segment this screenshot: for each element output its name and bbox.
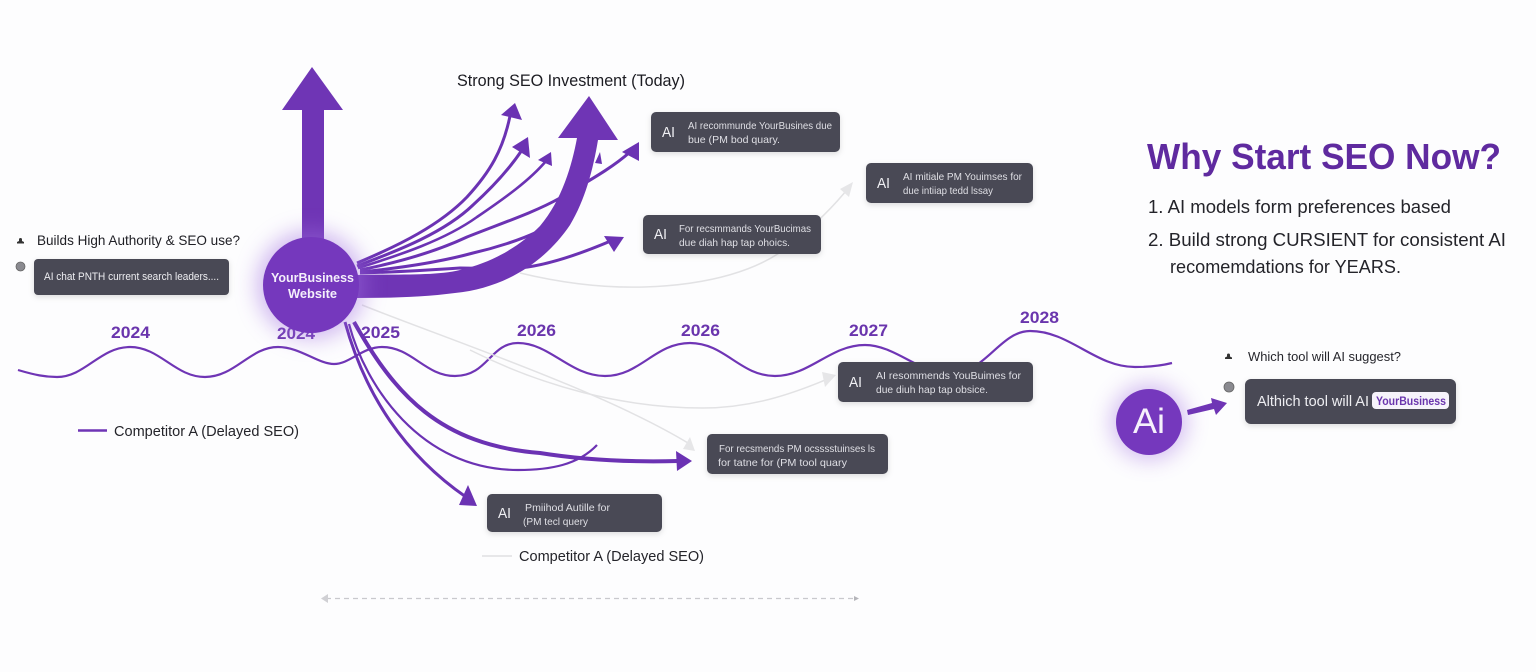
- icon: user: [17, 238, 24, 244]
- competitor grey arrows: [362, 182, 853, 451]
- card: top recommendation: AI recommunde YourBusines due: [688, 120, 832, 132]
- chat bubble right: [1245, 379, 1456, 424]
- icon: user right: [1225, 354, 1232, 359]
- node: AI: [1111, 384, 1187, 460]
- card: mid recommendation: For recsmmands YourBucimas: [679, 223, 811, 235]
- list of reasons: 1. AI models form preferences based: [1148, 196, 1451, 217]
- card: top recommendation: AI: [662, 124, 675, 141]
- chat bubble left: [34, 259, 229, 295]
- card: initial recommendation: AI: [877, 175, 890, 192]
- year labels: 2024: [277, 324, 316, 343]
- icon: AI globe right: [1224, 382, 1234, 392]
- card: lower recommendation: For recsmends PM ocsssstuinses ls: [719, 443, 875, 455]
- card: mid recommendation: AI: [654, 226, 667, 243]
- chat prompt right: Which tool will AI suggest?: [1248, 350, 1401, 364]
- card: competitor recommendation: AI resommends YouBuimes for: [876, 370, 1022, 382]
- node: AI: Ai: [1133, 402, 1165, 441]
- card: lower recommendation: [707, 434, 888, 474]
- list of reasons: [1148, 196, 1506, 277]
- card: bottom recommendation: (PM tecl query: [523, 516, 589, 528]
- card: competitor recommendation: [838, 362, 1033, 402]
- year labels: [111, 308, 1059, 343]
- upward recommendation arrows: [357, 103, 639, 273]
- card: bottom recommendation: [487, 494, 662, 532]
- card: initial recommendation: [866, 163, 1033, 203]
- legend: competitor grey: Competitor A (Delayed SEO): [519, 549, 704, 565]
- card: bottom recommendation: AI: [498, 505, 511, 522]
- card: top recommendation: [651, 112, 840, 152]
- title: Why Start SEO Now?: [1147, 136, 1501, 177]
- node: YourBusiness Website: YourBusiness: [271, 270, 354, 285]
- year labels: 2026: [517, 321, 556, 340]
- legend: competitor purple: Competitor A (Delayed SEO): [114, 424, 299, 440]
- card: competitor recommendation: AI: [849, 374, 862, 391]
- chat bubble right: YourBusiness: [1376, 396, 1446, 408]
- chat bubble right: Althich tool will AI: [1257, 394, 1369, 410]
- timeline wave: [18, 331, 1172, 377]
- arrow: vertical growth: [282, 67, 343, 243]
- list of reasons: 2. Build strong CURSIENT for consistent AI: [1148, 229, 1506, 250]
- year labels: 2027: [849, 321, 888, 340]
- chat bubble left: AI chat PNTH current search leaders....: [44, 271, 219, 283]
- arrow: AI to bubble: [1187, 398, 1227, 415]
- card: bottom recommendation: Pmiihod Autille for: [525, 502, 611, 514]
- downward recommendation arrows: [345, 322, 692, 506]
- dashed time range arrow: [321, 594, 859, 603]
- year labels: 2028: [1020, 308, 1059, 327]
- node: YourBusiness Website: Website: [288, 286, 337, 301]
- year labels: 2026: [681, 321, 720, 340]
- card: mid recommendation: due diah hap tap ohoics.: [679, 237, 790, 249]
- year labels: 2025: [361, 323, 400, 342]
- list of reasons: recomemdations for YEARS.: [1170, 256, 1401, 277]
- card: competitor recommendation: due diuh hap tap obsice.: [876, 384, 988, 396]
- year labels: 2024: [111, 323, 151, 342]
- card: mid recommendation: [643, 215, 821, 254]
- node: YourBusiness Website: [257, 231, 365, 339]
- chat prompt left: Builds High Authority & SEO use?: [37, 232, 240, 248]
- card: top recommendation: bue (PM bod quary.: [688, 134, 780, 146]
- card: initial recommendation: AI mitiale PM Youimses for: [903, 171, 1022, 183]
- card: lower recommendation: for tatne for (PM tool quary: [718, 457, 848, 469]
- card: initial recommendation: due intiiap tedd lssay: [903, 185, 994, 197]
- icon: AI globe left: [16, 262, 25, 271]
- heading: strong SEO investment: Strong SEO Investment (Today): [457, 71, 685, 90]
- arrow: strong SEO investment: [355, 96, 618, 298]
